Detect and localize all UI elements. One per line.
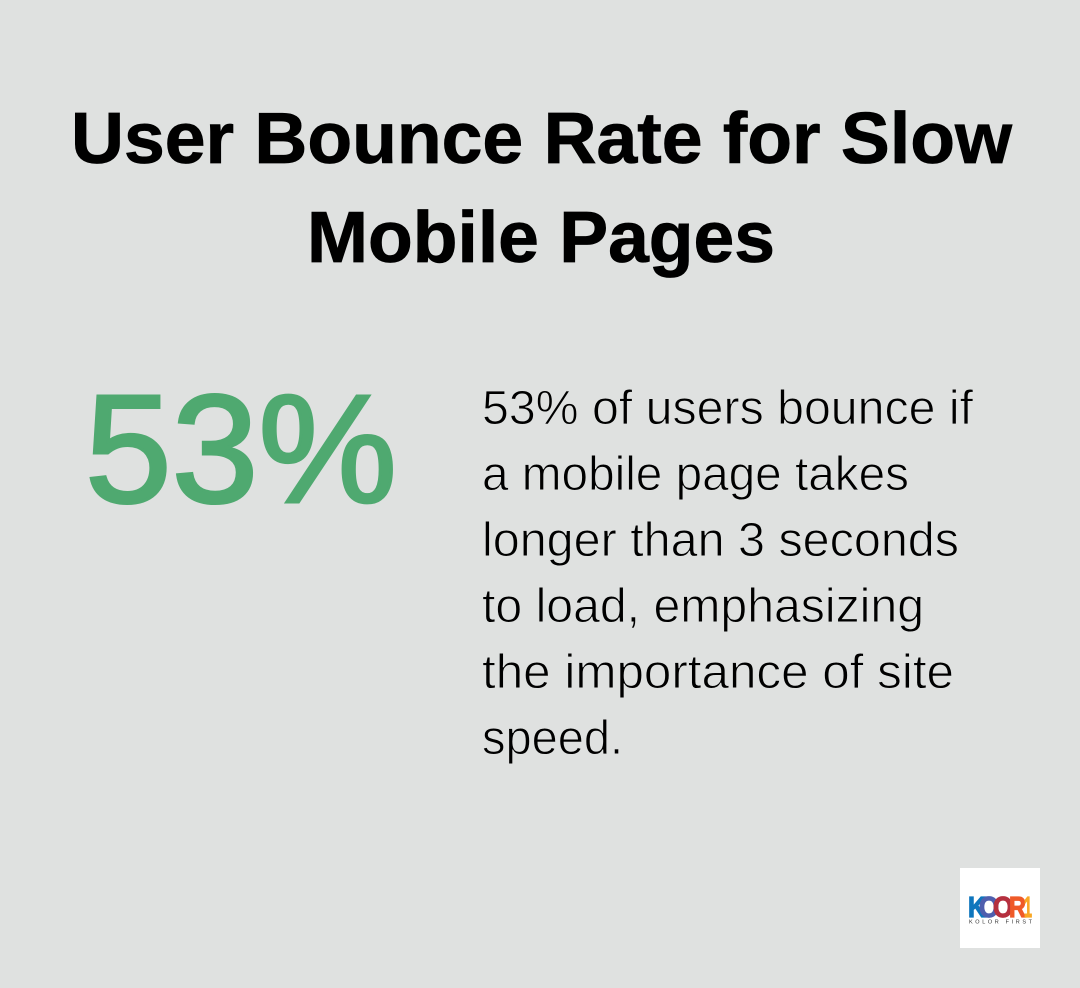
description text block: [482, 382, 974, 765]
logo: KOOR1 Kolor First: R: [1009, 892, 1026, 924]
logo: KOOR1 Kolor First: [960, 868, 1040, 948]
description text block: to load, emphasizing: [482, 580, 924, 633]
description text block: speed.: [482, 712, 623, 765]
logo: KOOR1 Kolor First: 1: [1024, 892, 1032, 924]
title: [71, 99, 1013, 278]
logo: KOOR1 Kolor First: KOLOR FIRST: [969, 920, 1033, 926]
description text block: 53% of users bounce if: [482, 382, 974, 435]
logo: KOOR1 Kolor First: O: [979, 892, 999, 924]
title: User Bounce Rate for Slow: [71, 99, 1013, 179]
big statistic: 53%: 53%: [85, 363, 397, 535]
description text block: a mobile page takes: [482, 448, 909, 501]
description text block: longer than 3 seconds: [482, 514, 959, 567]
logo: KOOR1 Kolor First: O: [993, 892, 1013, 924]
title: Mobile Pages: [307, 198, 775, 278]
description text block: the importance of site: [482, 646, 954, 699]
logo: KOOR1 Kolor First: K: [968, 892, 986, 924]
